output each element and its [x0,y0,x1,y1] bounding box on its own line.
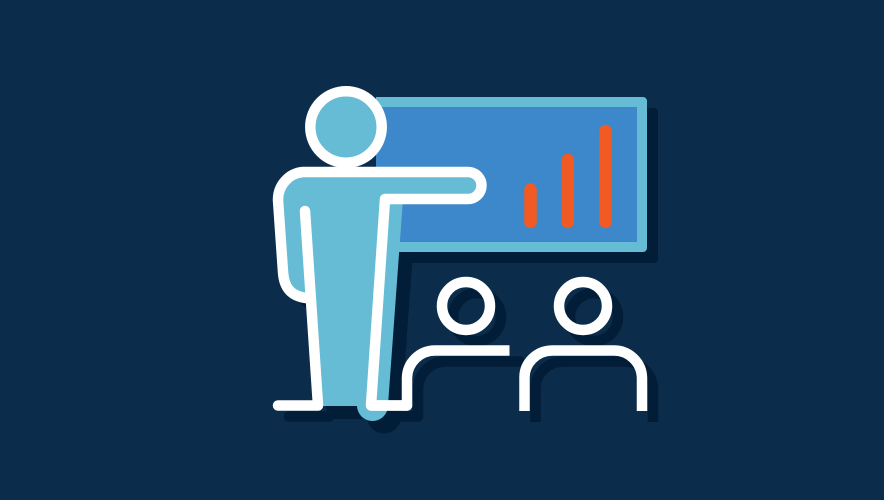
audience member: right [524,282,642,411]
bar chart [530,131,606,222]
audience member: left [371,282,510,406]
presentation board [360,97,647,252]
body fill [278,172,482,421]
inner arm and left foot [278,211,318,406]
head [310,91,382,163]
presenter figure [278,91,482,421]
drop shadows [289,108,658,432]
body outline [278,172,482,406]
